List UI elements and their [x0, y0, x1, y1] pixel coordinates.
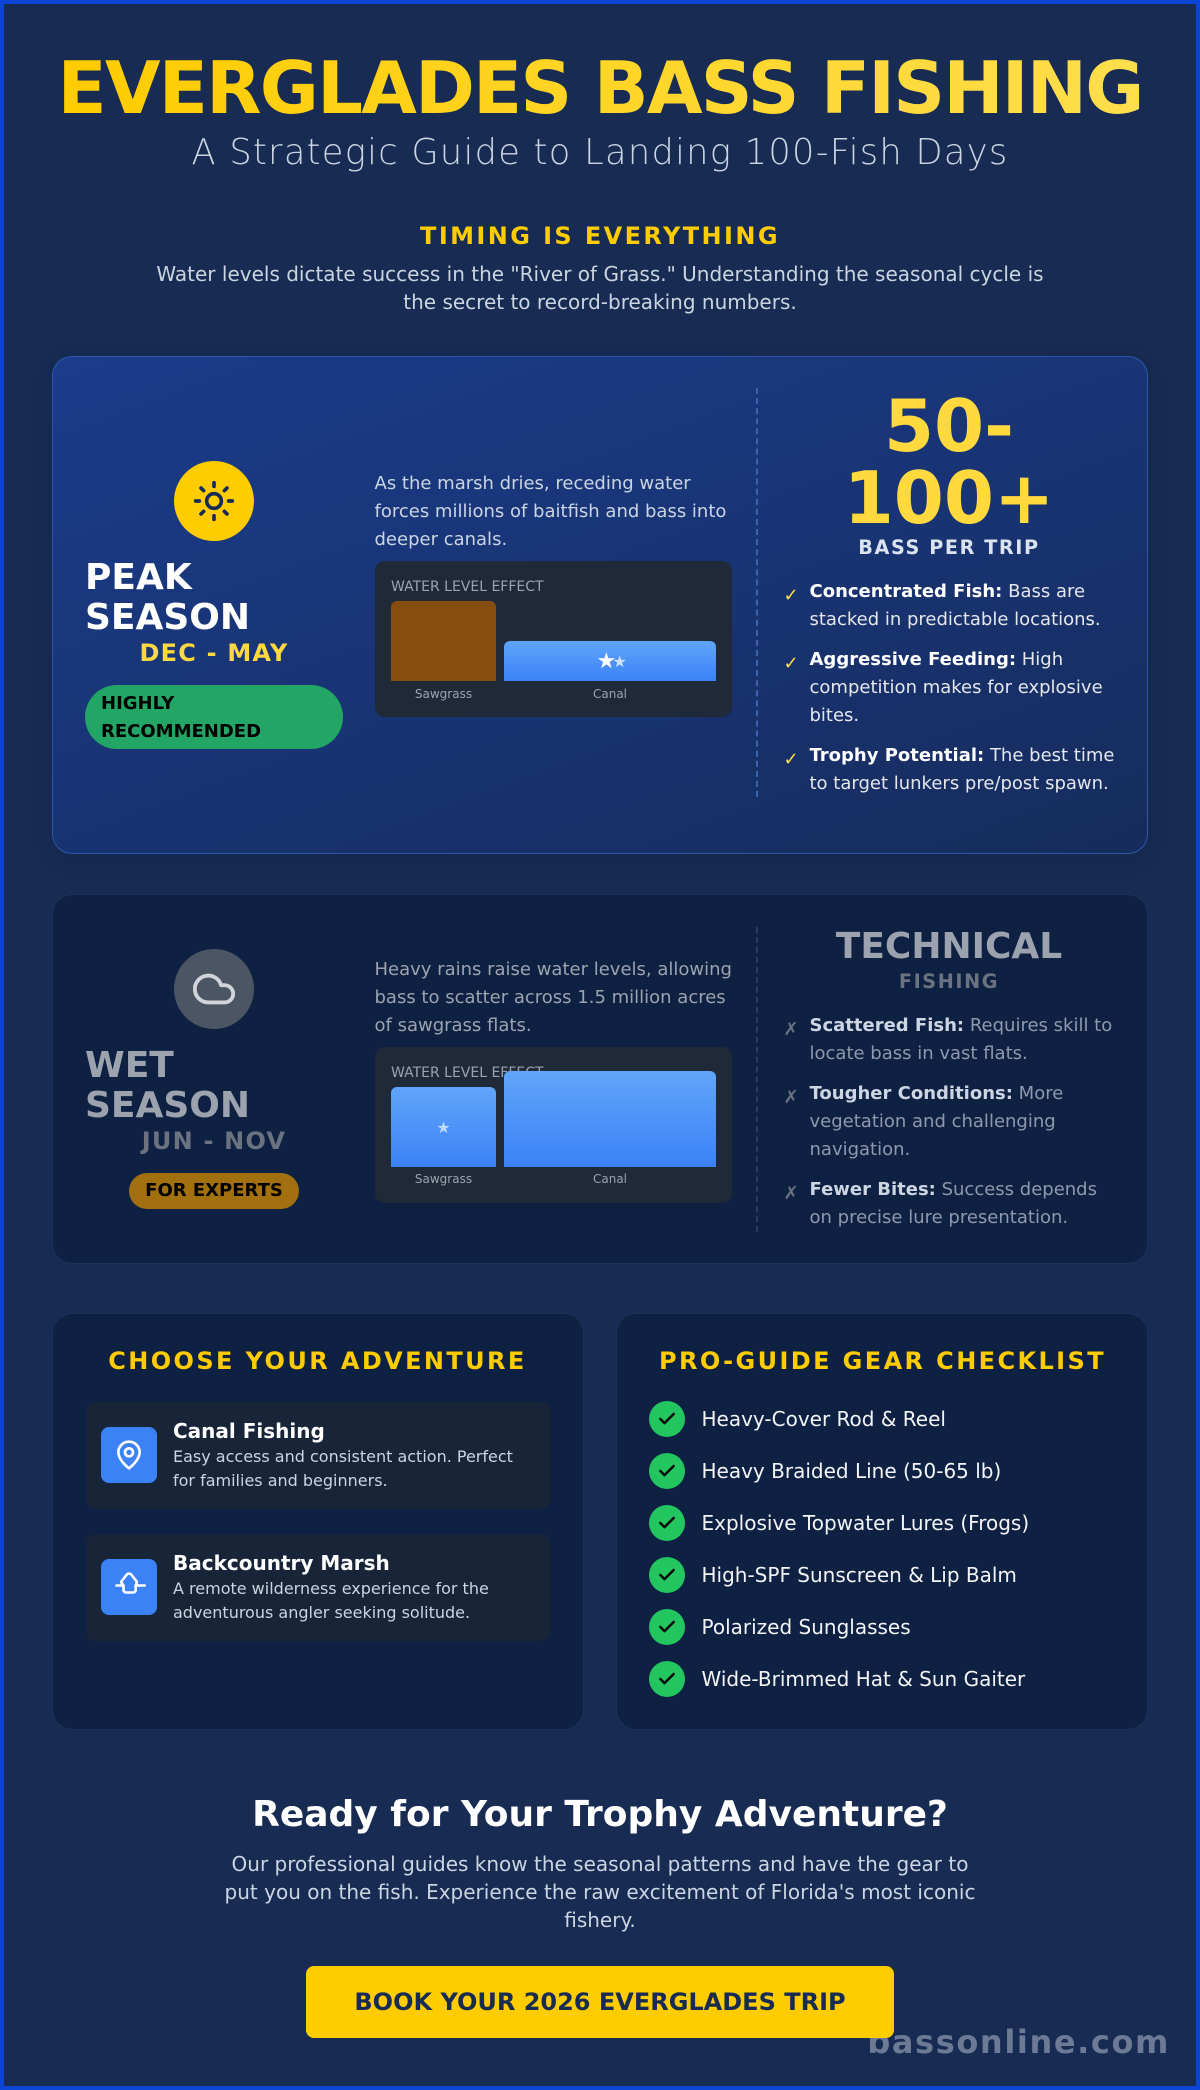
- list item: scattered fish: Scattered Fish: Requires skill to: [810, 1015, 1112, 1036]
- peak description: As the marsh dries, receding water: [374, 473, 691, 494]
- list item: concentrated fish: stacked in predictable locations.: [810, 609, 1101, 630]
- bar: sawgrass: [391, 1087, 496, 1167]
- wet season heading: WET: [85, 1044, 174, 1086]
- badge: highly recommended: [85, 685, 343, 749]
- bar label: sawgrass: Sawgrass: [415, 1172, 472, 1186]
- badge: highly recommended: HIGHLY: [101, 693, 174, 714]
- chart label: WATER LEVEL EFFECT: [391, 579, 544, 595]
- stat: 50-100+: 50-: [884, 384, 1014, 468]
- option text: for families and beginners.: [173, 1470, 388, 1490]
- stat: 50-100+: 100+: [844, 456, 1054, 540]
- gear item: topwater lures: [649, 1505, 1029, 1541]
- wet description: Heavy rains raise water levels, allowing: [374, 959, 732, 980]
- watermark: bassonline.com: [867, 2023, 1170, 2061]
- adventure heading: CHOOSE YOUR ADVENTURE: [108, 1347, 527, 1375]
- list item: aggressive feeding: bites.: [810, 705, 859, 726]
- list item: trophy potential: ✓: [784, 749, 799, 770]
- list item: trophy potential: to target lunkers pre/post spawn.: [810, 773, 1109, 794]
- call to action text: [225, 1852, 975, 1932]
- list item: tougher conditions: Tougher Conditions: More: [810, 1083, 1063, 1104]
- list item: scattered fish: locate bass in vast flats.: [810, 1043, 1028, 1064]
- icon: cloud: [174, 949, 254, 1029]
- gear item: rod and reel: Heavy-Cover Rod & Reel: [702, 1407, 946, 1431]
- list item: aggressive feeding: ✓: [784, 653, 799, 674]
- stat label: BASS PER TRIP: [858, 536, 1040, 559]
- list item: tougher conditions: ✗: [784, 1087, 799, 1108]
- fishing subheading: FISHING: [899, 970, 999, 993]
- wet description: of sawgrass flats.: [374, 1015, 532, 1036]
- gear item: hat and gaiter: [649, 1661, 1026, 1697]
- gear item: sunglasses: Polarized Sunglasses: [702, 1615, 911, 1639]
- option: canal fishing: [86, 1402, 551, 1509]
- list item: tougher conditions: vegetation and challenging: [810, 1111, 1056, 1132]
- panel: gear checklist: [616, 1313, 1148, 1730]
- checklist heading: PRO-GUIDE GEAR CHECKLIST: [659, 1347, 1106, 1375]
- list item: trophy potential: Trophy Potential: The best time: [810, 745, 1114, 766]
- section heading: timing: TIMING IS EVERYTHING: [420, 222, 780, 250]
- list item: tougher conditions: navigation.: [810, 1139, 910, 1160]
- bar: canal: ★: [612, 652, 627, 671]
- badge: for experts: FOR EXPERTS: [145, 1180, 283, 1201]
- gear item: topwater lures: Explosive Topwater Lures (Frogs): [702, 1511, 1029, 1535]
- intro text: Water levels dictate success in the "River of Grass." Understanding the seasonal cycle is: [156, 262, 1044, 286]
- peak season heading: SEASON: [85, 596, 250, 638]
- list item: concentrated fish: Concentrated Fish: Bass are: [810, 581, 1085, 602]
- title: EVERGLADES BASS FISHING: [57, 46, 1143, 130]
- gear item: sunglasses: [649, 1609, 911, 1645]
- badge: for experts: [129, 1173, 299, 1209]
- peak description: forces millions of baitfish and bass into: [374, 501, 726, 522]
- option text: A remote wilderness experience for the: [173, 1578, 489, 1598]
- call to action heading: Ready for Your Trophy Adventure?: [252, 1794, 948, 1834]
- list item: fewer bites: [784, 1179, 1097, 1228]
- gear item: braided line: [649, 1453, 1001, 1489]
- peak season heading: PEAK: [85, 556, 192, 598]
- bar: canal: [504, 641, 716, 681]
- bar: sawgrass: ★: [436, 1118, 451, 1137]
- option text: Easy access and consistent action. Perfect: [173, 1446, 513, 1466]
- subtitle: A Strategic Guide to Landing 100-Fish Days: [191, 132, 1009, 173]
- stat: 50-100+: [844, 384, 1054, 540]
- option title: Backcountry Marsh: [173, 1551, 390, 1575]
- button: book trip: [306, 1966, 894, 2038]
- option text: [173, 1446, 513, 1490]
- icon: map pin: [101, 1427, 157, 1483]
- bar: sawgrass: [391, 601, 496, 681]
- gear item: sunscreen: [649, 1557, 1017, 1593]
- option title: Canal Fishing: [173, 1419, 325, 1443]
- list item: tougher conditions: [784, 1083, 1063, 1160]
- peak description: [374, 473, 726, 550]
- icon: sun: [174, 461, 254, 541]
- option text: [173, 1578, 489, 1622]
- panel: choose your adventure: [52, 1313, 584, 1730]
- chart label: WATER LEVEL EFFECT: [391, 1065, 544, 1081]
- list item: scattered fish: ✗: [784, 1019, 799, 1040]
- list item: aggressive feeding: Aggressive Feeding: High: [810, 649, 1063, 670]
- gear item: braided line: Heavy Braided Line (50-65 lb): [702, 1459, 1001, 1483]
- bar: canal: ★: [596, 649, 616, 674]
- call to action text: put you on the fish. Experience the raw excitement of Florida's most iconic: [225, 1880, 975, 1904]
- list item: concentrated fish: ✓: [784, 585, 799, 606]
- bar: canal: [504, 1071, 716, 1167]
- peak season dates: DEC - MAY: [140, 639, 288, 667]
- badge: highly recommended: RECOMMENDED: [101, 721, 261, 742]
- wet season dates: JUN - NOV: [142, 1127, 286, 1155]
- bar label: sawgrass: Sawgrass: [415, 687, 472, 701]
- wet season heading: SEASON: [85, 1084, 250, 1126]
- list item: fewer bites: Fewer Bites: Success depends: [810, 1179, 1097, 1200]
- wet description: [374, 959, 732, 1036]
- gear item: rod and reel: [649, 1401, 946, 1437]
- option text: adventurous angler seeking solitude.: [173, 1602, 470, 1622]
- chart: wet water level: [375, 1047, 732, 1203]
- list item: aggressive feeding: [784, 649, 1103, 726]
- list item: fewer bites: on precise lure presentation.: [810, 1207, 1068, 1228]
- icon: marsh boat: [101, 1559, 157, 1615]
- button: book trip: BOOK YOUR 2026 EVERGLADES TRIP: [354, 1988, 846, 2016]
- technical heading: TECHNICAL: [836, 926, 1062, 966]
- bar label: canal: Canal: [593, 687, 627, 701]
- list item: scattered fish: [784, 1015, 1112, 1064]
- wet season heading: [85, 1044, 250, 1126]
- chart: peak water level: [375, 561, 732, 717]
- gear item: hat and gaiter: Wide-Brimmed Hat & Sun Gaiter: [702, 1667, 1025, 1691]
- intro text: the secret to record-breaking numbers.: [403, 290, 797, 314]
- call to action text: Our professional guides know the seasonal patterns and have the gear to: [232, 1852, 968, 1876]
- panel: peak season: [52, 356, 1148, 854]
- list item: aggressive feeding: competition makes for explosive: [810, 677, 1103, 698]
- option: backcountry marsh: [86, 1534, 551, 1641]
- list item: trophy potential: [784, 745, 1114, 794]
- peak season heading: [85, 556, 250, 638]
- list item: fewer bites: ✗: [784, 1183, 799, 1204]
- call to action text: fishery.: [564, 1908, 636, 1932]
- gear item: sunscreen: High-SPF Sunscreen & Lip Balm: [702, 1563, 1017, 1587]
- list item: concentrated fish: [784, 581, 1101, 630]
- peak description: deeper canals.: [374, 529, 507, 550]
- bar label: canal: Canal: [593, 1172, 627, 1186]
- intro text: [156, 262, 1044, 314]
- wet description: bass to scatter across 1.5 million acres: [374, 987, 726, 1008]
- panel: wet season: [52, 894, 1148, 1264]
